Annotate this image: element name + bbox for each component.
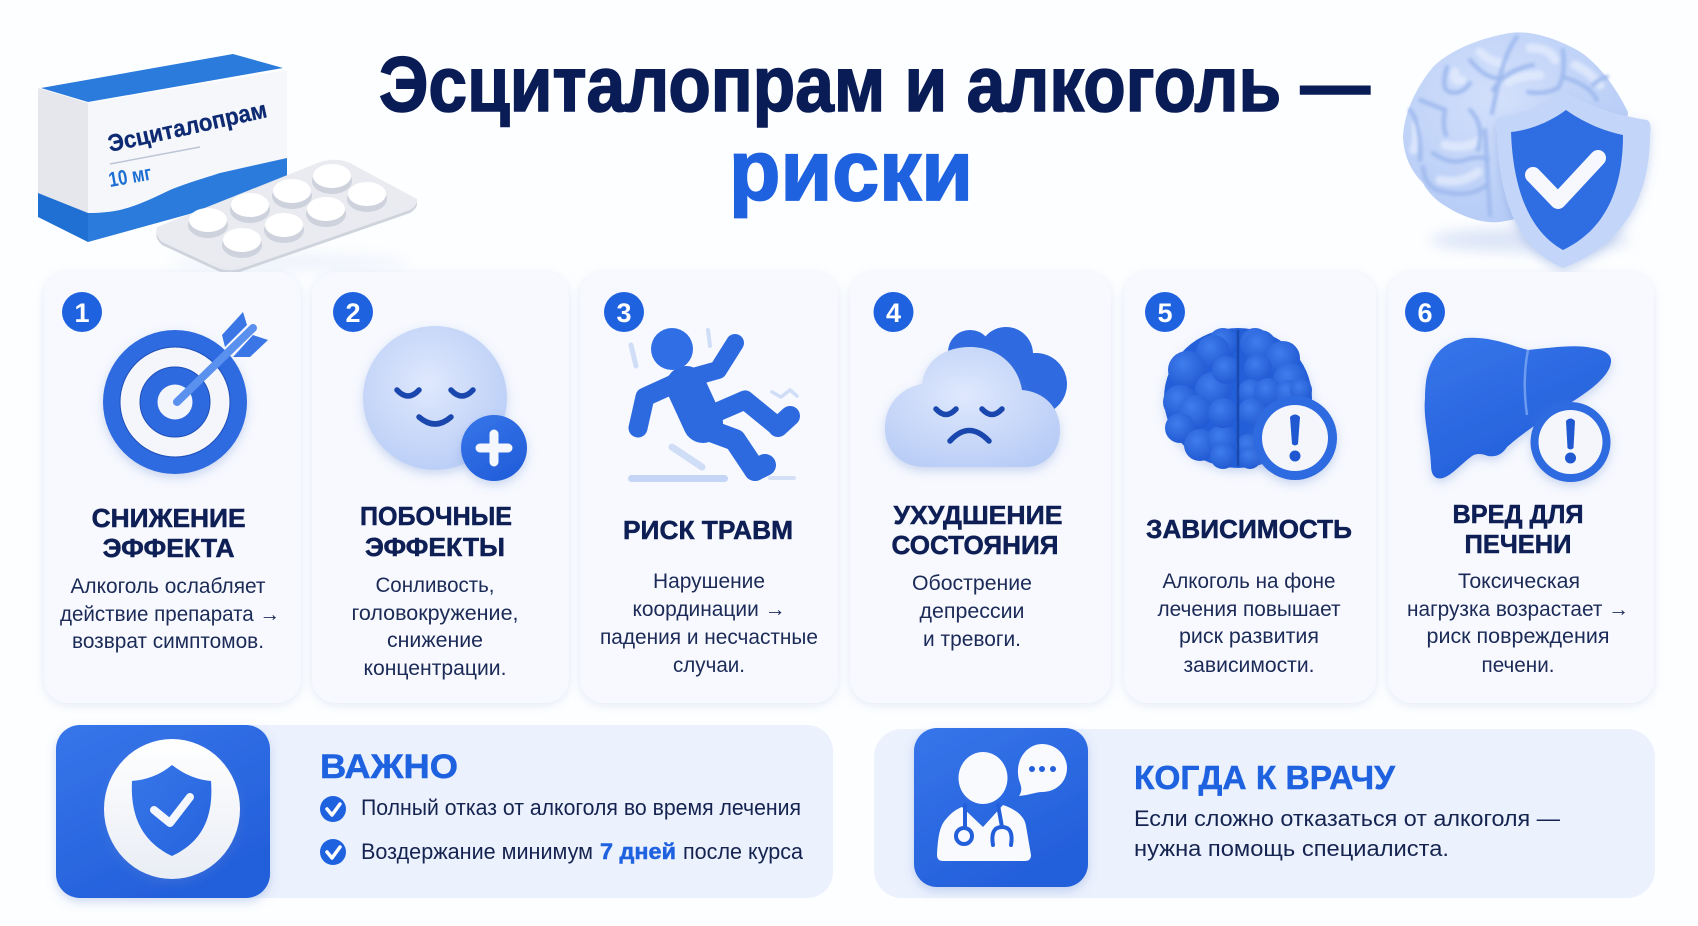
icon: shield on blue tile <box>56 725 270 898</box>
heading <box>92 505 246 563</box>
panel: card 6 <box>1388 272 1654 703</box>
icon: liver with alert <box>1425 338 1611 482</box>
badge 6 <box>1405 292 1445 332</box>
heading: РИСК ТРАВМ <box>623 517 793 545</box>
body text: нужна помощь специалиста. <box>1134 836 1449 861</box>
badge 5: 5 <box>1157 298 1173 328</box>
icon: brain with shield <box>1403 32 1651 268</box>
body text: и тревоги. <box>923 628 1021 651</box>
check item 1: Полный отказ от алкоголя во время лечения <box>361 795 801 820</box>
badge 4: 4 <box>886 298 901 328</box>
badge 1: 1 <box>74 298 90 328</box>
check item 2 <box>320 839 804 865</box>
body text: Нарушение <box>653 570 765 593</box>
check item 2: Воздержание минимум <box>361 839 593 864</box>
badge 3 <box>604 292 644 332</box>
heading <box>1452 501 1584 559</box>
body text: Если сложно отказаться от алкоголя — <box>1134 806 1560 831</box>
body text <box>600 570 818 677</box>
badge 2 <box>333 292 373 332</box>
panel: card 4 <box>850 272 1111 703</box>
body text <box>1134 806 1560 861</box>
badge 3: 3 <box>616 298 632 328</box>
body text: возврат симптомов. <box>72 630 264 653</box>
body text: нагрузка возрастает → <box>1407 598 1629 621</box>
body text: лечения повышает <box>1158 598 1341 621</box>
icon: target with arrow <box>103 312 268 474</box>
body text: концентрации. <box>364 657 506 680</box>
heading: ЭФФЕКТЫ <box>365 534 505 562</box>
badge 1 <box>62 292 102 332</box>
title: Эсциталопрам и алкоголь — <box>379 40 1370 128</box>
body text: падения и несчастные <box>600 626 818 649</box>
body text: риск повреждения <box>1426 625 1610 648</box>
body text: головокружение, <box>352 602 518 625</box>
body text <box>912 572 1032 651</box>
body text: координации → <box>632 598 786 621</box>
heading: ЭФФЕКТА <box>103 535 235 563</box>
title: риски <box>729 124 973 219</box>
body text: Сонливость, <box>376 574 494 597</box>
body text: Обострение <box>912 572 1032 595</box>
heading: УХУДШЕНИЕ <box>894 502 1062 530</box>
icon: medicine box and blister <box>38 54 417 273</box>
icon: brain with alert <box>1163 328 1337 480</box>
heading: КОГДА К ВРАЧУ <box>1134 759 1395 796</box>
heading: СОСТОЯНИЯ <box>892 532 1058 560</box>
panel: card 3 <box>580 272 838 703</box>
body text: снижение <box>387 629 483 652</box>
body text: Алкоголь на фоне <box>1162 570 1336 593</box>
check item 2: 7 дней <box>600 839 676 864</box>
panel: important <box>56 725 833 898</box>
heading <box>360 503 512 562</box>
title <box>379 40 1370 219</box>
body text: действие препарата → <box>60 603 280 626</box>
panel: card 5 <box>1124 272 1376 703</box>
panel: card 1 <box>44 272 301 703</box>
body text <box>1158 570 1341 677</box>
body text: депрессии <box>920 600 1024 623</box>
body text: риск развития <box>1179 625 1319 648</box>
icon: falling person <box>628 328 797 482</box>
panel: when to see a doctor <box>874 728 1655 898</box>
body text <box>352 574 518 680</box>
body text: зависимости. <box>1184 654 1314 677</box>
body text: Токсическая <box>1458 570 1580 593</box>
badge 6: 6 <box>1417 298 1433 328</box>
body text: Алкоголь ослабляет <box>70 575 266 598</box>
body text <box>60 575 280 653</box>
body text <box>1407 570 1629 677</box>
badge 2: 2 <box>345 298 361 328</box>
heading: ПОБОЧНЫЕ <box>360 503 512 531</box>
badge 4 <box>874 292 914 332</box>
heading: ВАЖНО <box>320 748 458 786</box>
heading: ВРЕД ДЛЯ <box>1452 501 1584 529</box>
check item 2: после курса <box>683 839 804 864</box>
panel: card 2 <box>312 272 569 703</box>
body text: печени. <box>1482 654 1554 677</box>
heading: ЗАВИСИМОСТЬ <box>1146 516 1352 544</box>
icon: sleepy face with plus <box>363 326 527 481</box>
icon: medicine box and blister: 10 мг <box>107 162 153 192</box>
icon: doctor on blue tile <box>914 728 1088 887</box>
heading: СНИЖЕНИЕ <box>92 505 246 533</box>
heading <box>892 502 1062 560</box>
icon: sad cloud <box>885 327 1067 467</box>
body text: случаи. <box>673 654 745 677</box>
heading: ПЕЧЕНИ <box>1464 531 1572 559</box>
icon: medicine box and blister: Эсциталопрам <box>105 96 269 158</box>
badge 5 <box>1145 292 1185 332</box>
